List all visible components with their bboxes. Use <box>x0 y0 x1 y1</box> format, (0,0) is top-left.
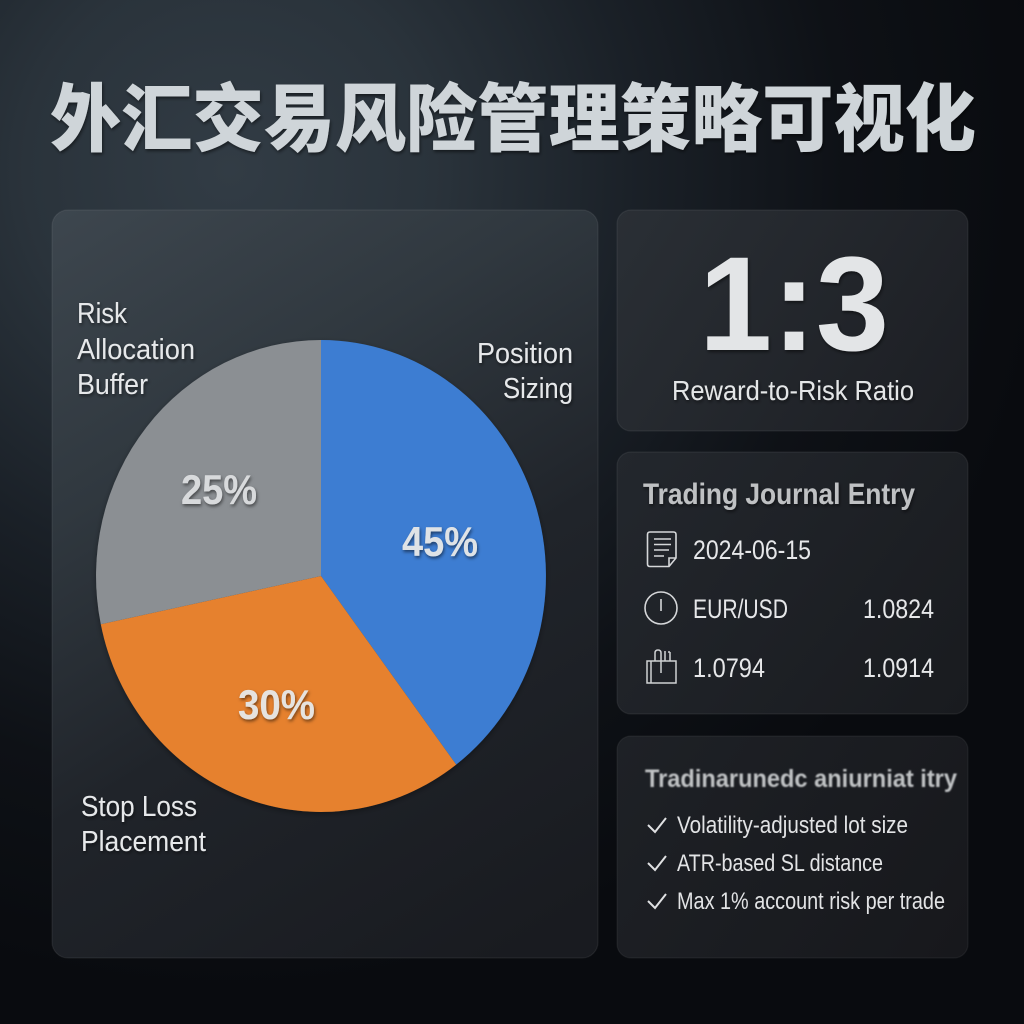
journal target price: 1.0914 <box>863 653 934 683</box>
label: risk allocation buffer: Allocation <box>77 334 195 366</box>
panel: reward-to-risk ratio <box>617 210 968 431</box>
title: 外汇交易风险管理策略可视化 <box>50 60 976 167</box>
value: 25%: 25% <box>181 466 257 513</box>
journal entry price: 1.0824 <box>863 594 934 624</box>
checklist item 2: ATR-based SL distance <box>677 850 883 877</box>
journal date: 2024-06-15 <box>693 535 811 565</box>
checklist item 3: Max 1% account risk per trade <box>677 888 945 915</box>
label: stop loss placement: Placement <box>81 826 206 858</box>
panel: risk checklist <box>617 736 968 958</box>
checklist item 1: Volatility-adjusted lot size <box>677 812 908 839</box>
journal pair: EUR/USD <box>693 594 788 624</box>
icon: document <box>648 532 676 566</box>
journal stop price: 1.0794 <box>693 653 765 683</box>
panel: trading journal entry <box>617 452 968 714</box>
big ratio number: 1:3 <box>699 230 889 379</box>
value: 45%: 45% <box>402 518 478 565</box>
label: risk allocation buffer: Risk <box>77 298 127 330</box>
label: risk allocation buffer <box>77 298 195 401</box>
slice: position sizing 45% <box>321 340 546 765</box>
icon: hand chart <box>647 650 676 683</box>
checklist heading (blurred in source): Tradinarunedc aniurniat itry <box>645 765 957 793</box>
label: risk allocation buffer: Buffer <box>77 369 148 401</box>
label: position sizing <box>477 338 573 405</box>
pie chart <box>96 340 546 812</box>
label: stop loss placement: Stop Loss <box>81 791 197 823</box>
panel: risk allocation pie <box>52 210 598 958</box>
journal heading: Trading Journal Entry <box>643 478 915 511</box>
slice: risk allocation buffer 25% <box>96 340 321 624</box>
icon: alert clock <box>645 592 677 624</box>
label: position sizing: Position <box>477 338 573 370</box>
label: stop loss placement <box>81 791 206 858</box>
slice: stop loss placement 30% <box>101 576 456 812</box>
label: position sizing: Sizing <box>503 373 573 405</box>
value: 30%: 30% <box>238 681 315 728</box>
ratio caption: Reward-to-Risk Ratio <box>672 375 914 406</box>
